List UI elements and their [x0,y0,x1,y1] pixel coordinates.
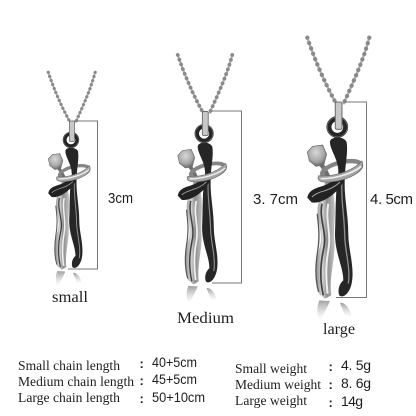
size bracket: small [68,121,98,269]
label: medium: Medium [177,310,235,327]
chain length table: 45+5cm [152,372,197,387]
chain length table: Medium chain length [18,374,134,389]
chain length table: 50+10cm [152,390,205,405]
chain length table: 40+5cm [152,355,197,370]
weight table: Large weight [235,393,307,408]
pendant: large [307,38,369,321]
weight table [235,357,371,410]
weight table: 14g [341,393,363,409]
chain length table: : [140,373,144,388]
dimension: medium: 3. 7cm [253,191,298,208]
pendant: medium [178,55,232,304]
size bracket: medium [212,111,242,283]
dimension: large: 4. 5cm [370,191,413,208]
weight table: 8. 6g [341,375,371,391]
weight table: Medium weight [235,377,321,392]
chain length table: Large chain length [18,390,120,405]
label: large: large [323,321,355,338]
chain length table: Small chain length [18,358,120,373]
weight table: : [328,377,333,392]
weight table: 4. 5g [341,357,371,373]
weight table: Small weight [235,361,307,376]
chain length table: : [140,356,144,371]
chain length table: : [140,391,144,406]
pendant: small [48,72,95,287]
label: small: small [52,289,88,306]
size bracket: large [336,102,366,298]
dimension: small: 3cm [108,190,133,207]
chain length table [18,355,205,406]
weight table: : [328,359,333,374]
weight table: : [328,395,333,410]
